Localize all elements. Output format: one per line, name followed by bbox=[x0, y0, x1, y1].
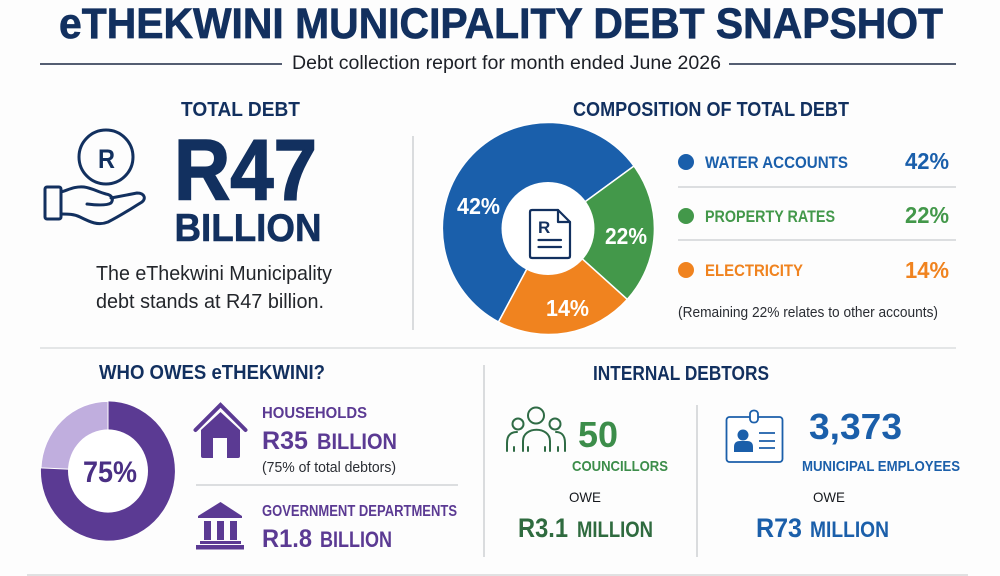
icon: hand holding rand coin: R bbox=[98, 144, 115, 174]
big number: R47: R47 bbox=[174, 122, 317, 218]
title: eTHEKWINI MUNICIPALITY DEBT SNAPSHOT bbox=[59, 0, 943, 48]
heading: total debt: TOTAL DEBT bbox=[181, 98, 300, 121]
donut chart: 75 percent: 75% bbox=[83, 456, 137, 489]
households text: (75% of total debtors) bbox=[262, 460, 396, 476]
donut chart: 75 percent bbox=[41, 401, 175, 541]
icon: councillors group bbox=[507, 408, 565, 451]
councillors owe amount: OWE bbox=[569, 489, 601, 505]
description: debt stands at R47 billion. bbox=[96, 291, 324, 313]
councillors count: COUNCILLORS bbox=[572, 458, 668, 475]
panel: internal debtors bbox=[507, 363, 960, 543]
icon: rand document: R bbox=[538, 218, 550, 237]
legend: property rates bbox=[678, 202, 949, 228]
legend: property rates: 22% bbox=[905, 202, 949, 228]
donut chart: debt composition: 42% bbox=[457, 193, 500, 219]
icon: rand document bbox=[530, 210, 570, 258]
households text: R35 bbox=[262, 427, 308, 455]
heading: composition: COMPOSITION OF TOTAL DEBT bbox=[573, 98, 849, 121]
government departments text bbox=[262, 503, 457, 553]
employees owe amount bbox=[756, 489, 889, 543]
councillors count: 50 bbox=[578, 414, 618, 455]
employees count bbox=[802, 406, 960, 475]
councillors owe amount: MILLION bbox=[577, 517, 653, 542]
employees count: MUNICIPAL EMPLOYEES bbox=[802, 458, 960, 475]
households text: HOUSEHOLDS bbox=[262, 405, 367, 422]
panel: composition of total debt bbox=[442, 98, 956, 335]
donut chart: debt composition: 22% bbox=[605, 223, 647, 249]
panel: who owes eThekwini bbox=[41, 362, 458, 553]
councillors count bbox=[572, 414, 668, 475]
subtitle: Debt collection report for month ended June 2026 bbox=[292, 52, 721, 74]
employees owe amount: OWE bbox=[813, 489, 845, 505]
description: The eThekwini Municipality bbox=[96, 263, 332, 285]
note: remaining share: (Remaining 22% relates to other accounts) bbox=[678, 305, 938, 321]
legend: property rates: PROPERTY RATES bbox=[705, 208, 835, 226]
heading: who owes: WHO OWES eTHEKWINI? bbox=[99, 362, 325, 384]
employees owe amount: MILLION bbox=[810, 517, 889, 542]
heading: internal debtors: INTERNAL DEBTORS bbox=[593, 363, 769, 385]
legend: water accounts: 42% bbox=[905, 148, 949, 174]
councillors owe amount: R3.1 bbox=[518, 513, 568, 543]
description bbox=[96, 263, 332, 313]
government departments text: R1.8 bbox=[262, 525, 312, 553]
employees owe amount: R73 bbox=[756, 513, 802, 543]
icon: employee ID card bbox=[726, 410, 782, 462]
legend: electricity bbox=[678, 257, 949, 283]
government departments text: GOVERNMENT DEPARTMENTS bbox=[262, 503, 457, 520]
government departments text: BILLION bbox=[320, 527, 392, 552]
header bbox=[40, 0, 956, 74]
employees count: 3,373 bbox=[809, 406, 902, 447]
households text: BILLION bbox=[317, 429, 397, 454]
big unit: billion: BILLION bbox=[174, 207, 322, 250]
icon: hand holding rand coin bbox=[45, 130, 144, 224]
councillors owe amount bbox=[518, 489, 653, 543]
icon: house bbox=[196, 405, 246, 458]
icon: government building bbox=[196, 502, 244, 550]
donut chart: debt composition bbox=[442, 122, 654, 335]
legend: water accounts: WATER ACCOUNTS bbox=[705, 154, 848, 172]
legend: water accounts bbox=[678, 148, 949, 174]
donut chart: debt composition: 14% bbox=[546, 295, 589, 321]
legend: electricity: 14% bbox=[905, 257, 949, 283]
households text bbox=[262, 405, 397, 476]
panel: total debt bbox=[45, 98, 332, 313]
legend: electricity: ELECTRICITY bbox=[705, 262, 803, 280]
